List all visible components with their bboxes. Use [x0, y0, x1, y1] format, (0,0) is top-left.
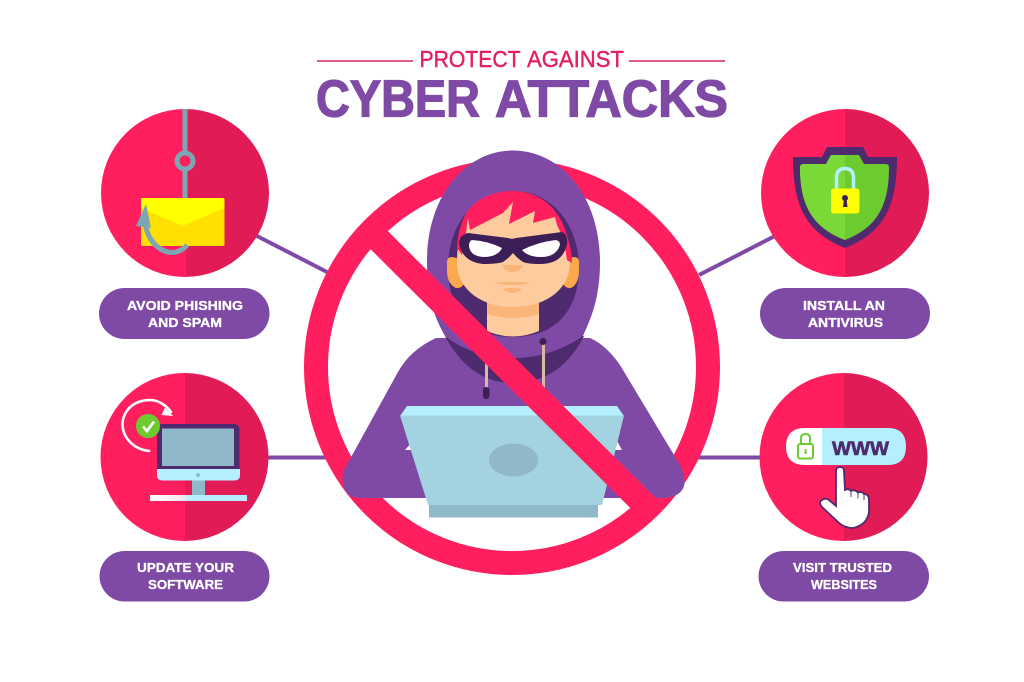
- hoodie body: [342, 338, 685, 498]
- label text: [127, 298, 243, 330]
- panel: install antivirus: [760, 108, 930, 339]
- title rule right: [629, 60, 725, 62]
- upper lip: [495, 282, 530, 285]
- subtitle: protect against: [420, 46, 624, 72]
- label text: WEBSITES: [811, 577, 877, 592]
- hood: [427, 150, 600, 358]
- panel: avoid phishing: [99, 108, 271, 339]
- hood opening: [448, 191, 579, 337]
- icon: fishing hook and envelope: [136, 109, 224, 252]
- laptop top edge: [400, 406, 624, 416]
- title: [316, 46, 728, 128]
- label text: AND SPAM: [148, 315, 222, 330]
- neck: [487, 295, 539, 336]
- heading: cyber attacks: [316, 70, 728, 128]
- hair: [457, 191, 572, 263]
- face: [457, 195, 570, 307]
- panel: update software: [100, 372, 270, 602]
- nose: [502, 265, 523, 272]
- label text: AVOID PHISHING: [127, 298, 243, 313]
- label text: ANTIVIRUS: [808, 315, 883, 330]
- right ear: [562, 257, 579, 288]
- panel: visit trusted websites: [758, 372, 929, 602]
- prohibition ring: [316, 171, 708, 563]
- icon: address bar and pointer: WWW: [832, 439, 889, 460]
- laptop base: [429, 505, 598, 518]
- label text: [793, 560, 892, 592]
- badge circle: [759, 372, 929, 542]
- right eye: [522, 240, 560, 257]
- badge circle: [760, 108, 930, 278]
- laptop background glints: [405, 441, 622, 450]
- left ear: [447, 257, 465, 288]
- prohibition slash: [365, 226, 650, 510]
- badge circle: [100, 108, 271, 278]
- laptop lid: [400, 416, 624, 505]
- label text: SOFTWARE: [148, 577, 223, 592]
- label text: INSTALL AN: [803, 298, 885, 313]
- heading: cyber attacks: CYBER: [316, 70, 480, 128]
- laptop: [400, 406, 624, 518]
- icon: shield with padlock: [793, 147, 897, 248]
- subtitle: protect against: PROTECT: [420, 46, 520, 72]
- label text: [137, 560, 235, 592]
- label text: [803, 298, 885, 330]
- hacker figure: [342, 150, 685, 518]
- title rule left: [317, 60, 413, 62]
- infographic: [99, 50, 930, 602]
- label pill: [99, 288, 270, 339]
- neck shadow: [487, 302, 539, 318]
- heading: cyber attacks: ATTACKS: [495, 70, 728, 128]
- label pill: [100, 551, 270, 602]
- left hood string: [483, 362, 490, 399]
- hood collar shadow: [445, 336, 584, 383]
- mask: [459, 232, 567, 264]
- badge circle: [100, 372, 270, 542]
- connector lines: [255, 235, 775, 458]
- laptop logo: [489, 444, 538, 476]
- subtitle: protect against: AGAINST: [527, 46, 624, 72]
- label text: VISIT TRUSTED: [793, 560, 892, 575]
- icon: monitor with update arrow: [122, 400, 247, 501]
- right hood string: [540, 338, 546, 391]
- label text: UPDATE YOUR: [137, 560, 235, 575]
- lower lip: [503, 288, 522, 293]
- label pill: [760, 288, 930, 339]
- label pill: [758, 551, 929, 602]
- left eye: [469, 240, 502, 257]
- icon: address bar and pointer: [786, 428, 906, 528]
